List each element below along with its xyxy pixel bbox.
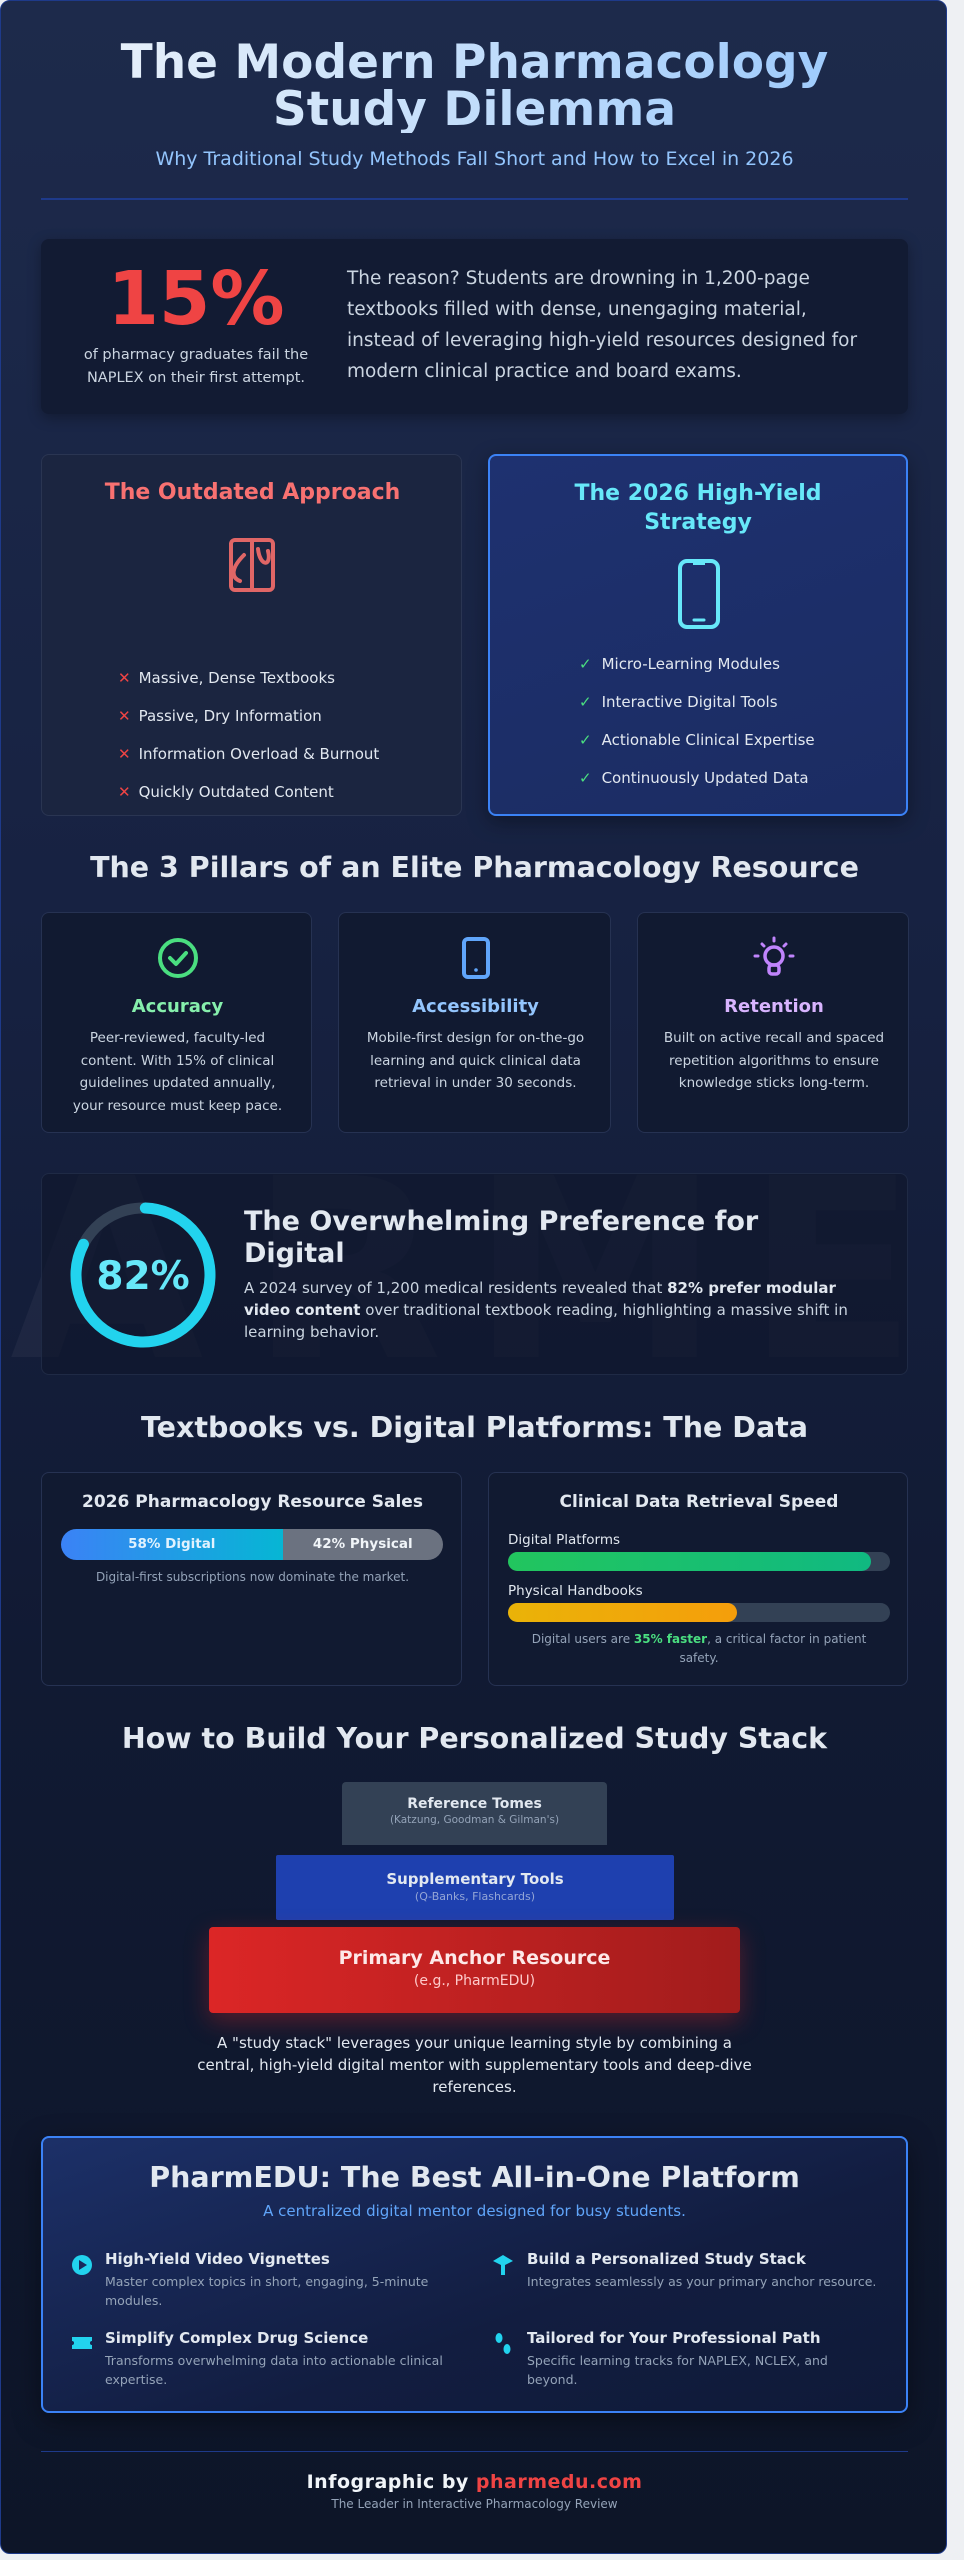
bar: digital — [508, 1532, 890, 1571]
stat caption — [84, 347, 308, 386]
feature: drug science — [72, 2329, 443, 2387]
caption: Digital users are 35% faster, a critical factor in patient safety. — [532, 1632, 866, 1665]
watermark: A — [10, 1125, 203, 1416]
donut chart 82% — [70, 1202, 216, 1348]
watermark: R — [250, 1125, 443, 1416]
list: benefits: ✓ Continuously Updated Data — [579, 769, 809, 787]
panel: high-yield strategy — [488, 454, 908, 816]
footer — [307, 2471, 642, 2511]
title: Study Dilemma — [273, 82, 676, 137]
list: benefits — [579, 655, 815, 787]
title: The Modern Pharmacology — [121, 35, 828, 90]
title — [1, 39, 948, 133]
title: Accessibility — [412, 996, 539, 1017]
layer: supplementary tools: (Q-Banks, Flashcards) — [415, 1890, 535, 1903]
feature: study stack — [493, 2250, 876, 2289]
heading: data: Textbooks vs. Digital Platforms: The Data — [141, 1411, 808, 1444]
icon: ticket — [72, 2337, 92, 2349]
list: benefits: ✓ Interactive Digital Tools — [579, 693, 778, 711]
feature: study stack: Build a Personalized Study Stack — [527, 2250, 806, 2268]
list: drawbacks: ✕ Passive, Dry Information — [118, 707, 322, 725]
layer: primary anchor: (e.g., PharmEDU) — [414, 1973, 535, 1989]
stat box: 15% — [41, 239, 908, 414]
stat explanation: The reason? Students are drowning in 1,200-page textbooks filled with dense, unengaging material, instead of leveraging high-yield resources designed for modern clinical practice and board exams. — [347, 268, 857, 382]
layer: supplementary tools: Supplementary Tools — [386, 1870, 564, 1888]
icon: footsteps — [496, 2333, 510, 2354]
feature: drug science: Transforms overwhelming data into actionable clinical expertise. — [105, 2353, 443, 2387]
feature: drug science: Simplify Complex Drug Science — [105, 2329, 368, 2347]
icon: lightbulb — [754, 936, 794, 976]
list: benefits: ✓ Actionable Clinical Expertise — [579, 731, 815, 749]
pillar: accessibility — [338, 912, 611, 1133]
panel: digital preference — [41, 1173, 908, 1375]
layer: reference tomes — [342, 1782, 607, 1845]
description: Mobile-first design for on-the-go learning and quick clinical data retrieval in under 30 seconds. — [367, 1030, 584, 1091]
bar: physical — [508, 1583, 890, 1622]
feature: professional path: Tailored for Your Professional Path — [527, 2329, 821, 2347]
list: drawbacks: ✕ Massive, Dense Textbooks — [118, 669, 335, 687]
watermark — [10, 1125, 917, 1416]
layer: reference tomes: Reference Tomes — [407, 1796, 542, 1812]
subtitle: Why Traditional Study Methods Fall Short and How to Excel in 2026 — [155, 148, 794, 170]
icon: phone — [462, 937, 490, 979]
stack description: A "study stack" leverages your unique learning style by combining a central, high-yield digital mentor with supplementary tools and deep-dive references. — [197, 2034, 752, 2096]
heading: pillars: The 3 Pillars of an Elite Pharmacology Resource — [90, 851, 859, 884]
layer: reference tomes: (Katzung, Goodman & Gilman's) — [390, 1814, 559, 1826]
chart title: Clinical Data Retrieval Speed — [560, 1492, 838, 1512]
stacked bar: 42% Physical — [313, 1536, 413, 1552]
description: A 2024 survey of 1,200 medical residents revealed that 82% prefer modular video content over traditional textbook reading, highlighting a massive shift in learning behavior. — [244, 1279, 848, 1341]
pillar: retention — [637, 912, 909, 1133]
stacked bar — [61, 1529, 443, 1560]
bar: digital: Digital Platforms — [508, 1532, 620, 1548]
watermark: E — [746, 1125, 917, 1416]
stat number: 15% — [107, 256, 285, 342]
list: drawbacks — [118, 669, 379, 801]
bar: physical: Physical Handbooks — [508, 1583, 643, 1599]
list: drawbacks: ✕ Information Overload & Burnout — [118, 745, 379, 763]
feature: professional path: Specific learning tracks for NAPLEX, NCLEX, and beyond. — [527, 2353, 828, 2387]
heading: PharmEDU: The Best All-in-One Platform — [149, 2161, 800, 2194]
icon: phone — [678, 559, 720, 629]
stacked bar: 58% Digital — [128, 1536, 215, 1552]
layer: supplementary tools — [276, 1855, 674, 1920]
caption: Digital-first subscriptions now dominate the market. — [96, 1570, 409, 1584]
pillar: accuracy — [41, 912, 312, 1133]
description: Peer-reviewed, faculty-led content. With 15% of clinical guidelines updated annually, your resource must keep pace. — [73, 1030, 282, 1114]
feature: video vignettes: High-Yield Video Vignettes — [105, 2250, 330, 2268]
icon: layers — [493, 2255, 513, 2275]
feature: video vignettes — [72, 2250, 428, 2308]
description: Built on active recall and spaced repetition algorithms to ensure knowledge sticks long-term. — [664, 1030, 884, 1091]
panel: retrieval speed chart — [488, 1472, 908, 1686]
watermark: M — [471, 1125, 720, 1416]
heading: study stack: How to Build Your Personalized Study Stack — [122, 1722, 827, 1755]
stack diagram — [196, 1782, 753, 2034]
feature: video vignettes: Master complex topics in short, engaging, 5-minute modules. — [105, 2274, 428, 2308]
stat caption: of pharmacy graduates fail the — [84, 347, 308, 363]
heading: The Outdated Approach — [105, 480, 400, 505]
chart title: 2026 Pharmacology Resource Sales — [82, 1492, 423, 1512]
donut chart 82%: 82% — [96, 1254, 190, 1299]
title: Retention — [724, 996, 824, 1017]
panel: outdated approach — [41, 454, 462, 816]
heading: The 2026 High-Yield — [574, 481, 822, 506]
panel: sales chart — [41, 1472, 462, 1686]
heading: The Overwhelming Preference for Digital — [244, 1206, 758, 1269]
footer: The Leader in Interactive Pharmacology Review — [331, 2497, 618, 2511]
layer: primary anchor — [209, 1927, 740, 2013]
stat caption: NAPLEX on their first attempt. — [87, 370, 305, 386]
feature: study stack: Integrates seamlessly as your primary anchor resource. — [527, 2274, 876, 2289]
icon: book — [229, 538, 275, 592]
footer: Infographic by pharmedu.com — [307, 2471, 642, 2493]
panel: PharmEDU platform — [41, 2136, 908, 2413]
icon: check circle — [158, 938, 198, 978]
heading — [574, 481, 822, 535]
title: Accuracy — [132, 996, 223, 1017]
layer: primary anchor: Primary Anchor Resource — [339, 1947, 610, 1969]
heading: Strategy — [644, 510, 752, 535]
icon: play — [72, 2255, 92, 2275]
list: drawbacks: ✕ Quickly Outdated Content — [118, 783, 334, 801]
subtitle: A centralized digital mentor designed for busy students. — [263, 2202, 686, 2220]
feature: professional path — [496, 2329, 828, 2387]
list: benefits: ✓ Micro-Learning Modules — [579, 655, 780, 673]
